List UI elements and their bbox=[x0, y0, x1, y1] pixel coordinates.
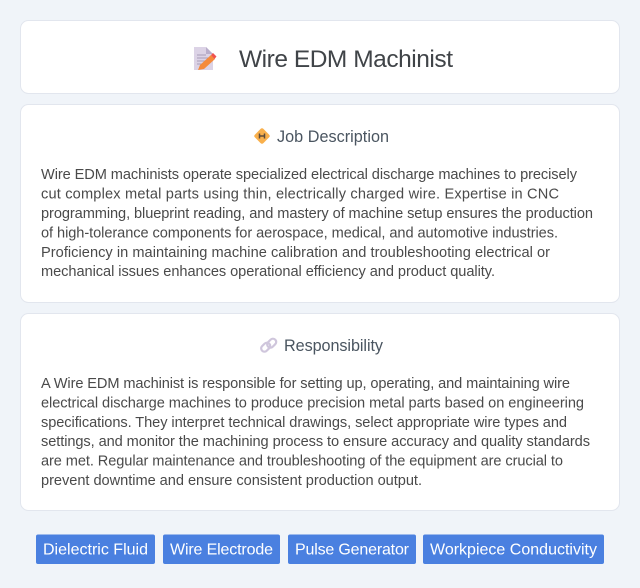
heading: job description: Job Description bbox=[277, 128, 389, 146]
text block: job description: cut complex metal parts using thin, electrically charged wire. Expertise in CNC bbox=[41, 186, 559, 202]
tag: workpiece conductivity: Workpiece Conductivity bbox=[430, 542, 597, 558]
tag: wire electrode: Wire Electrode bbox=[170, 542, 273, 558]
tag: wire electrode bbox=[163, 534, 280, 564]
heading: responsibility: Responsibility bbox=[284, 337, 384, 355]
text block: job description: programming, blueprint reading, and mastery of machine setup ensures the production bbox=[41, 206, 593, 222]
icon: document with pencil bbox=[194, 47, 216, 70]
text block: responsibility: settings, and monitor the machining process to ensure accuracy and quality standards bbox=[41, 434, 590, 450]
tag: workpiece conductivity bbox=[423, 534, 604, 564]
tag: pulse generator bbox=[288, 534, 416, 564]
text block: responsibility: are met. Regular maintenance and troubleshooting of the equipment are crucial to bbox=[41, 454, 563, 470]
text block: job description: of high-tolerance components for aerospace, medical, and automotive industries. bbox=[41, 226, 558, 242]
text block: responsibility: A Wire EDM machinist is responsible for setting up, operating, and maintaining wire bbox=[41, 376, 570, 392]
icon: orange diamond sign bbox=[254, 128, 270, 144]
tag: pulse generator: Pulse Generator bbox=[295, 542, 410, 558]
text block: responsibility: specifications. They interpret technical drawings, select appropriate wire types and bbox=[41, 415, 567, 431]
text block: job description: Proficiency in maintaining machine calibration and troubleshooting electrical or bbox=[41, 245, 550, 261]
text block: job description: Wire EDM machinists operate specialized electrical discharge machines to precisely bbox=[41, 167, 578, 183]
text block: responsibility bbox=[41, 376, 590, 489]
tag: dielectric fluid: Dielectric Fluid bbox=[43, 542, 148, 558]
text block: responsibility: prevent downtime and ensure consistent production output. bbox=[41, 473, 422, 489]
text block: responsibility: electrical discharge machines to produce precision metal parts based on engineering bbox=[41, 396, 584, 412]
icon: chain link bbox=[260, 337, 278, 353]
panel: title header bbox=[20, 20, 620, 94]
tag: dielectric fluid bbox=[36, 534, 155, 564]
title: Wire EDM Machinist bbox=[239, 46, 453, 73]
text block: job description: mechanical issues enhances operational efficiency and product quality. bbox=[41, 264, 495, 280]
panel: job description bbox=[20, 104, 620, 302]
text block: job description bbox=[41, 167, 593, 280]
panel: responsibility bbox=[20, 314, 620, 510]
